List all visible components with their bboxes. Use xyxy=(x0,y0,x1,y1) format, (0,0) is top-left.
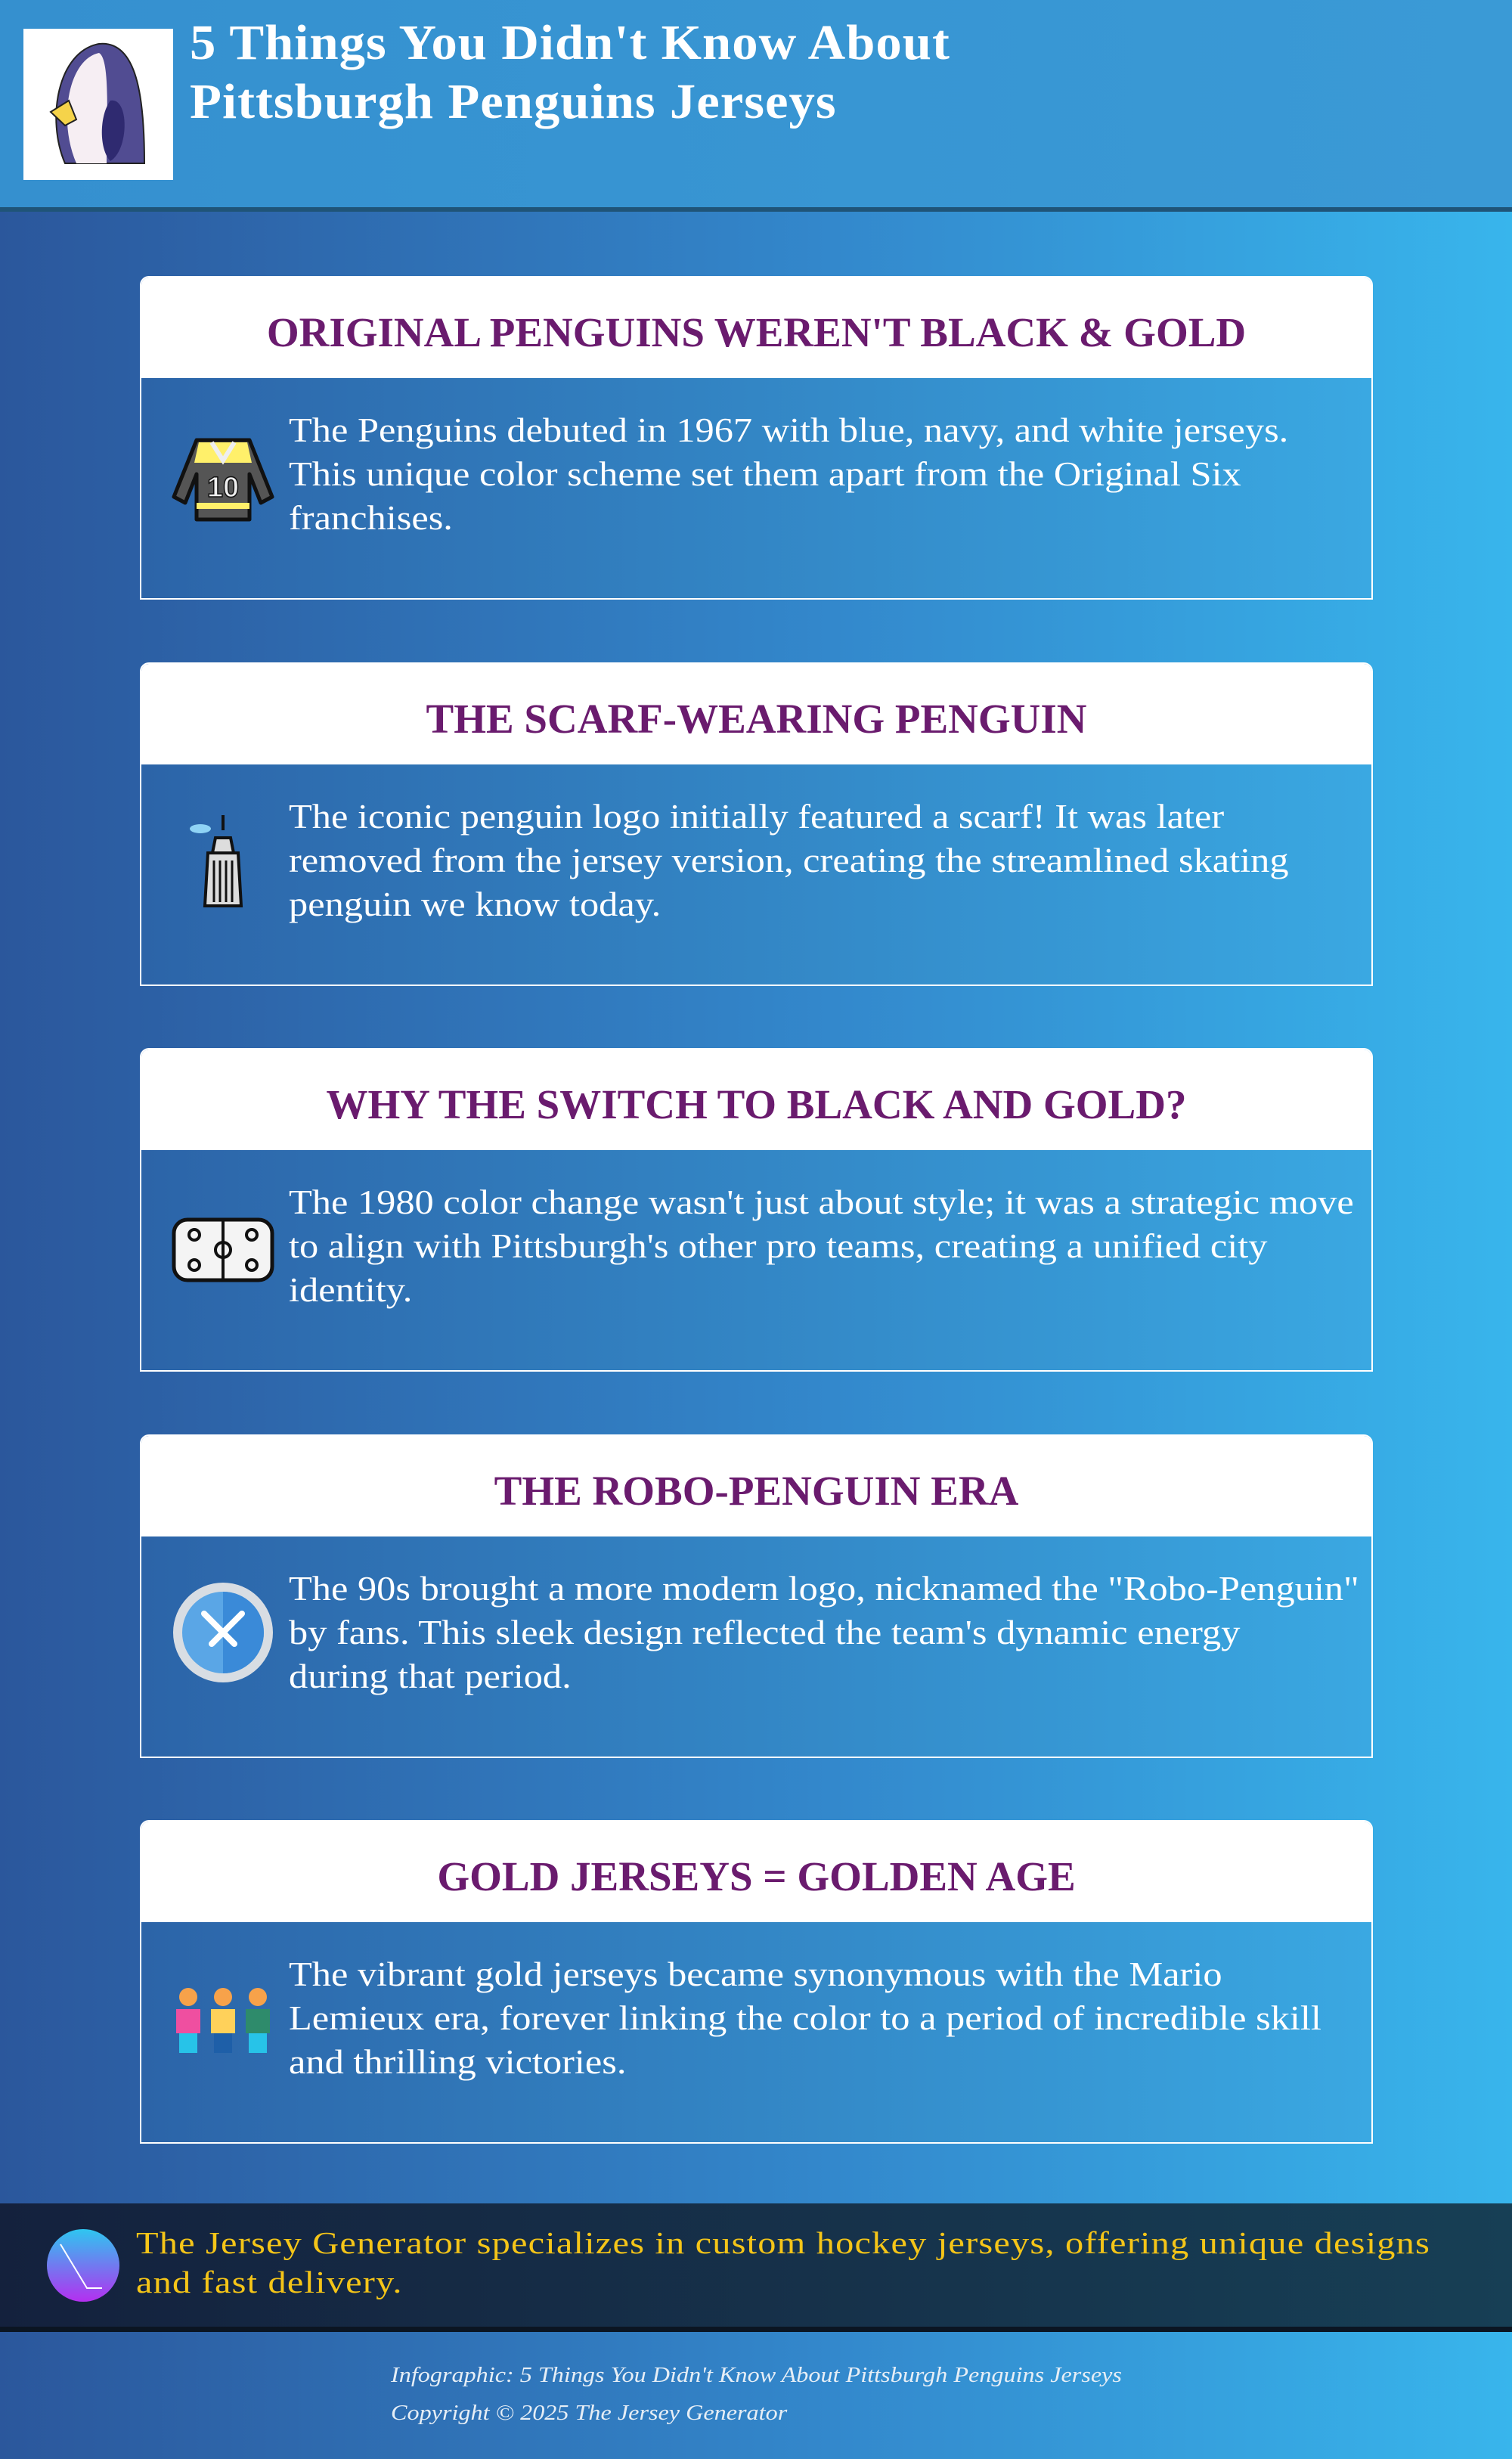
icon: sticks badge xyxy=(173,1583,273,1682)
panel: fact 3 xyxy=(140,1048,1373,1372)
heading xyxy=(141,278,1371,378)
text: company blurb: The Jersey Generator specializes in custom hockey jerseys, offering unique designs xyxy=(136,2225,1430,2260)
icon: hockey stick badge xyxy=(47,2229,119,2302)
logo: penguin xyxy=(23,29,173,180)
text: by fans. This sleek design reflected the team's dynamic energy xyxy=(289,1614,1240,1651)
text xyxy=(289,1955,1321,2081)
text: The iconic penguin logo initially featured a scarf! It was later xyxy=(289,798,1224,836)
text: penguin we know today. xyxy=(289,885,661,923)
text: The 90s brought a more modern logo, nicknamed the "Robo-Penguin" xyxy=(289,1570,1359,1608)
text xyxy=(289,798,1289,923)
text: franchises. xyxy=(289,499,453,537)
panel: fact 2 xyxy=(140,662,1373,986)
icon: people xyxy=(176,1988,270,2053)
icon: jersey xyxy=(172,439,274,522)
heading xyxy=(141,1436,1371,1536)
heading xyxy=(141,664,1371,764)
text xyxy=(289,1183,1354,1309)
text: identity. xyxy=(289,1271,412,1309)
heading xyxy=(141,1822,1371,1922)
text: company blurb: and fast delivery. xyxy=(136,2265,403,2299)
title xyxy=(190,15,950,129)
credits xyxy=(390,2363,1122,2425)
panel: fact 1 xyxy=(140,276,1373,600)
text: company blurb xyxy=(136,2225,1430,2299)
panel: fact 4 xyxy=(140,1434,1373,1758)
credits: Infographic: 5 Things You Didn't Know About Pittsburgh Penguins Jerseys xyxy=(391,2363,1122,2387)
icon: jersey: 10 xyxy=(207,472,239,504)
icon: building xyxy=(190,815,243,907)
text: to align with Pittsburgh's other pro teams, creating a unified city xyxy=(289,1227,1268,1265)
heading: GOLD JERSEYS = GOLDEN AGE xyxy=(437,1853,1076,1899)
credits: Copyright © 2025 The Jersey Generator xyxy=(391,2401,787,2425)
text: and thrilling victories. xyxy=(289,2043,627,2081)
heading xyxy=(141,1050,1371,1150)
title: 5 Things You Didn't Know About xyxy=(190,15,950,70)
heading: WHY THE SWITCH TO BLACK AND GOLD? xyxy=(327,1081,1186,1127)
text: The 1980 color change wasn't just about style; it was a strategic move xyxy=(289,1183,1354,1221)
text: during that period. xyxy=(289,1657,572,1695)
text xyxy=(289,1570,1359,1695)
footer banner xyxy=(0,2203,1512,2332)
title: Pittsburgh Penguins Jerseys xyxy=(190,74,837,129)
header xyxy=(0,0,1512,212)
heading: ORIGINAL PENGUINS WEREN'T BLACK & GOLD xyxy=(267,309,1246,355)
text: The vibrant gold jerseys became synonymous with the Mario xyxy=(289,1955,1222,1993)
heading: THE ROBO-PENGUIN ERA xyxy=(494,1468,1018,1514)
text: Lemieux era, forever linking the color to a period of incredible skill xyxy=(289,1999,1321,2037)
panel: fact 5 xyxy=(140,1820,1373,2144)
text xyxy=(289,411,1288,537)
text: The Penguins debuted in 1967 with blue, navy, and white jerseys. xyxy=(289,411,1288,449)
text: removed from the jersey version, creating the streamlined skating xyxy=(289,842,1289,879)
icon: rink xyxy=(172,1217,274,1282)
text: This unique color scheme set them apart from the Original Six xyxy=(289,455,1241,493)
heading: THE SCARF-WEARING PENGUIN xyxy=(426,696,1086,742)
